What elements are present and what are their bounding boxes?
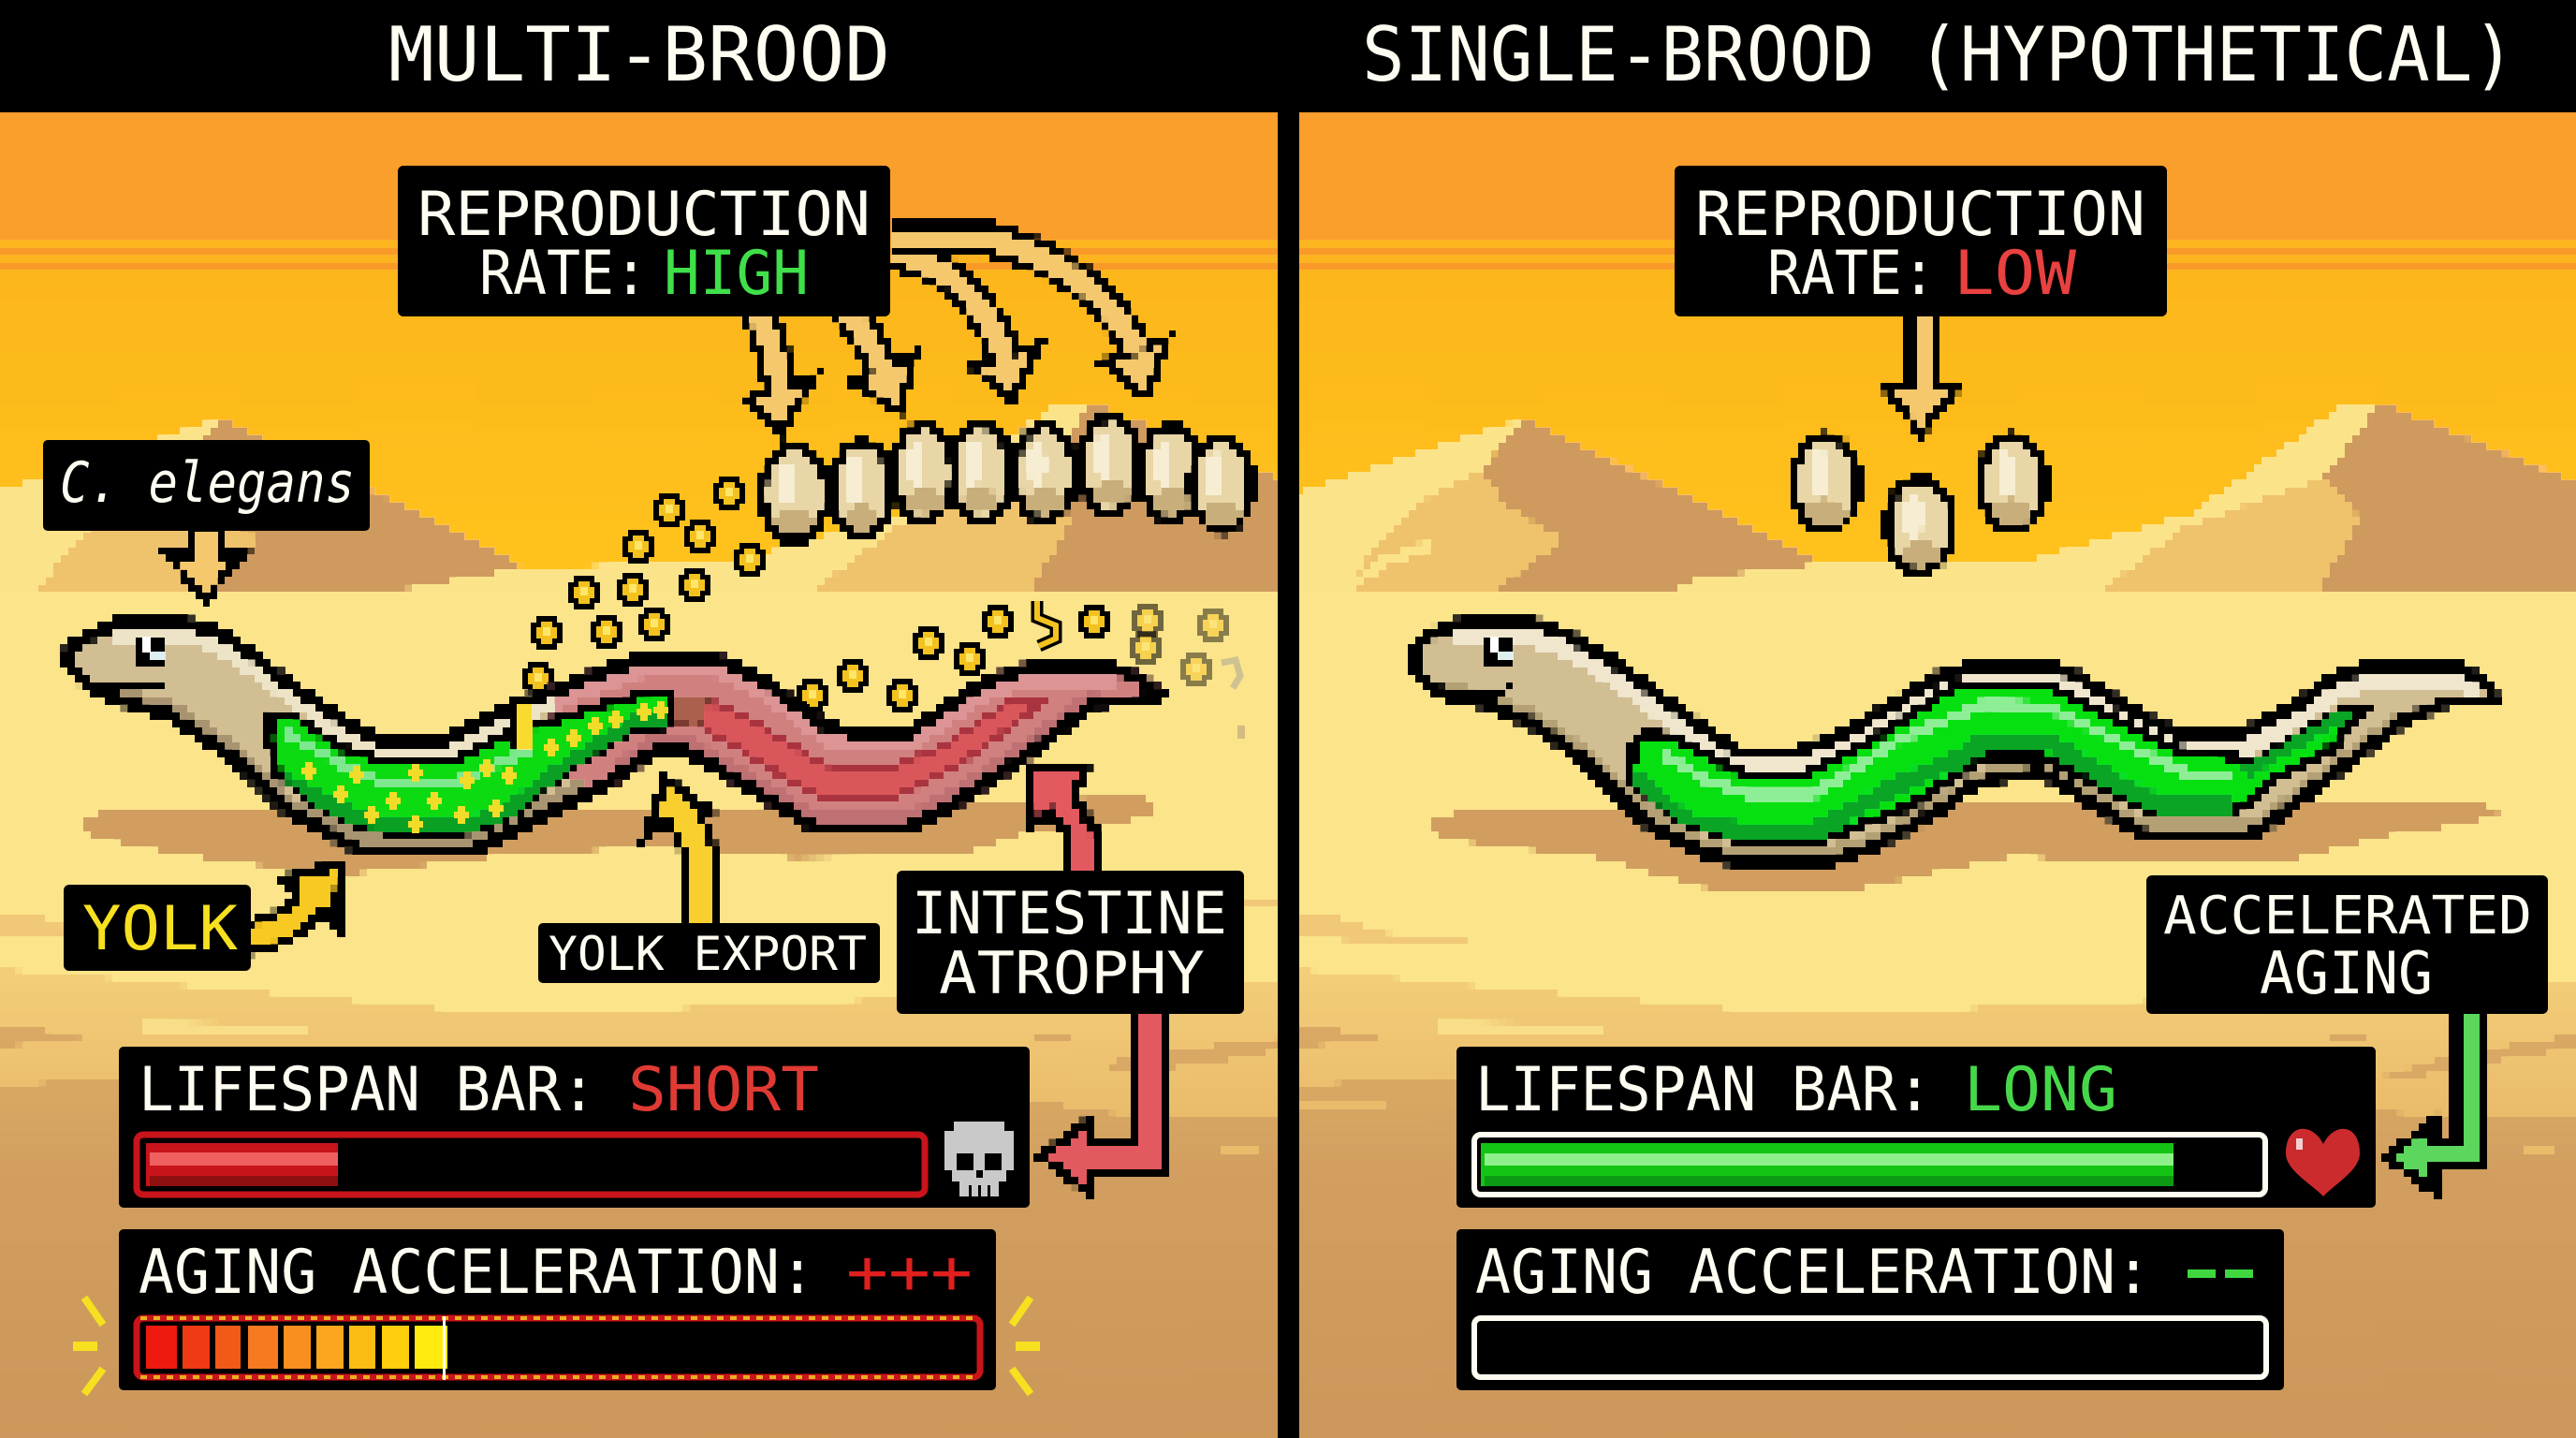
worm: single-brood with healthy intestine xyxy=(1385,599,2527,889)
divider between panels xyxy=(1278,0,1299,1438)
worm eye xyxy=(139,638,166,667)
worm shadow, left xyxy=(80,798,1153,875)
label: reproduction rate high: REPRODUCTION xyxy=(417,180,871,250)
panel: lifespan bar long: LIFESPAN BAR: xyxy=(1475,1055,1932,1125)
arrow: intestine atrophy to gut xyxy=(1030,768,1097,878)
yolk specks in gut xyxy=(301,701,668,833)
empty bar frame xyxy=(1474,1318,2266,1377)
label: intestine atrophy: ATROPHY xyxy=(939,939,1205,1007)
panel: aging acceleration none xyxy=(1456,1229,2284,1390)
arrows: reproduction high to eggs xyxy=(747,239,1167,433)
bar fill xyxy=(1481,1143,2174,1186)
body outline xyxy=(1406,617,2500,869)
panel: single-brood desert background xyxy=(1295,112,2576,1438)
arrow: yolk label to gut xyxy=(245,865,340,938)
title: multi-brood: MULTI-BROOD xyxy=(388,11,890,98)
gut transition xyxy=(674,697,711,726)
bar frame xyxy=(1474,1135,2265,1195)
yolk granules rising to the eggs xyxy=(522,477,766,696)
arrow: yolk export xyxy=(649,781,706,932)
arrow: accelerated aging to lifespan xyxy=(2389,1006,2482,1191)
bar fill xyxy=(146,1143,338,1186)
label: accelerated aging: ACCELERATED xyxy=(2163,886,2532,946)
label: C. elegans xyxy=(43,440,370,531)
label: reproduction rate high xyxy=(398,166,890,316)
yolk entering the body wall xyxy=(509,698,530,753)
label: reproduction rate low: RATE: xyxy=(1767,239,1936,309)
label: intestine atrophy xyxy=(897,871,1244,1014)
title: single-brood: SINGLE-BROOD (HYPOTHETICAL) xyxy=(1362,11,2515,98)
label: C. elegans: C. elegans xyxy=(60,450,355,516)
panel: aging acceleration high xyxy=(119,1229,996,1390)
body outline xyxy=(60,617,1169,857)
worm body, pink atrophied rear xyxy=(547,652,1162,832)
worm eye xyxy=(1486,638,1514,667)
arrow: C. elegans label to worm xyxy=(168,524,242,601)
worm mouth xyxy=(1432,680,1516,690)
yolk granules leaking from the tail xyxy=(797,601,1245,739)
label: reproduction rate low xyxy=(1675,166,2167,316)
panel: aging acceleration high: AGING ACCELERATION: xyxy=(139,1238,815,1308)
bar segments xyxy=(146,1316,447,1380)
header bar xyxy=(0,0,2576,112)
worms and callout arrows layer xyxy=(60,614,2502,1199)
label: reproduction rate low: LOW xyxy=(1954,239,2077,309)
arrow: reproduction low to eggs xyxy=(1885,309,1957,433)
worm mouth xyxy=(82,679,168,688)
label: accelerated aging: AGING xyxy=(2260,939,2433,1007)
panel: aging acceleration high: +++ xyxy=(846,1238,973,1308)
icon: heart xyxy=(2286,1129,2360,1196)
panel: multi-brood desert background xyxy=(0,112,1288,1438)
bar frame xyxy=(137,1318,980,1377)
label: accelerated aging xyxy=(2146,875,2548,1014)
label: reproduction rate high: HIGH xyxy=(664,239,809,309)
green healthy gut xyxy=(1630,683,2367,841)
worm: multi-brood with atrophied intestine xyxy=(60,614,1169,855)
icon: warning sparks left xyxy=(73,1298,103,1394)
arrow: intestine atrophy to lifespan xyxy=(1043,1006,1163,1191)
label: yolk export: YOLK EXPORT xyxy=(549,927,867,981)
worm body, tan front xyxy=(60,614,570,855)
worm shadow, right xyxy=(1424,799,2500,891)
minus marks xyxy=(2188,1269,2253,1278)
label: reproduction rate high: RATE: xyxy=(479,239,648,309)
worm body xyxy=(1385,599,2527,889)
eggs: multi-brood clutch xyxy=(762,418,1251,541)
red atrophied gut xyxy=(699,700,1040,799)
label: yolk xyxy=(64,885,251,971)
label: intestine atrophy: INTESTINE xyxy=(912,879,1227,947)
eggs: single-brood three eggs xyxy=(1793,436,2045,572)
bar frame xyxy=(137,1135,925,1195)
icon: warning sparks right xyxy=(1012,1298,1040,1394)
panel: lifespan bar short: LIFESPAN BAR: xyxy=(139,1055,596,1125)
panel: lifespan bar long xyxy=(1456,1047,2376,1208)
panel: lifespan bar short xyxy=(119,1047,1030,1208)
icon: skull xyxy=(944,1122,1014,1196)
green yolk-filled gut xyxy=(269,695,670,831)
panel: lifespan bar short: SHORT xyxy=(628,1055,819,1125)
label: yolk: YOLK xyxy=(82,894,238,964)
panel: lifespan bar long: LONG xyxy=(1964,1055,2117,1125)
label: reproduction rate low: REPRODUCTION xyxy=(1695,180,2145,250)
panel: aging acceleration none: AGING ACCELERATION: xyxy=(1475,1238,2151,1308)
